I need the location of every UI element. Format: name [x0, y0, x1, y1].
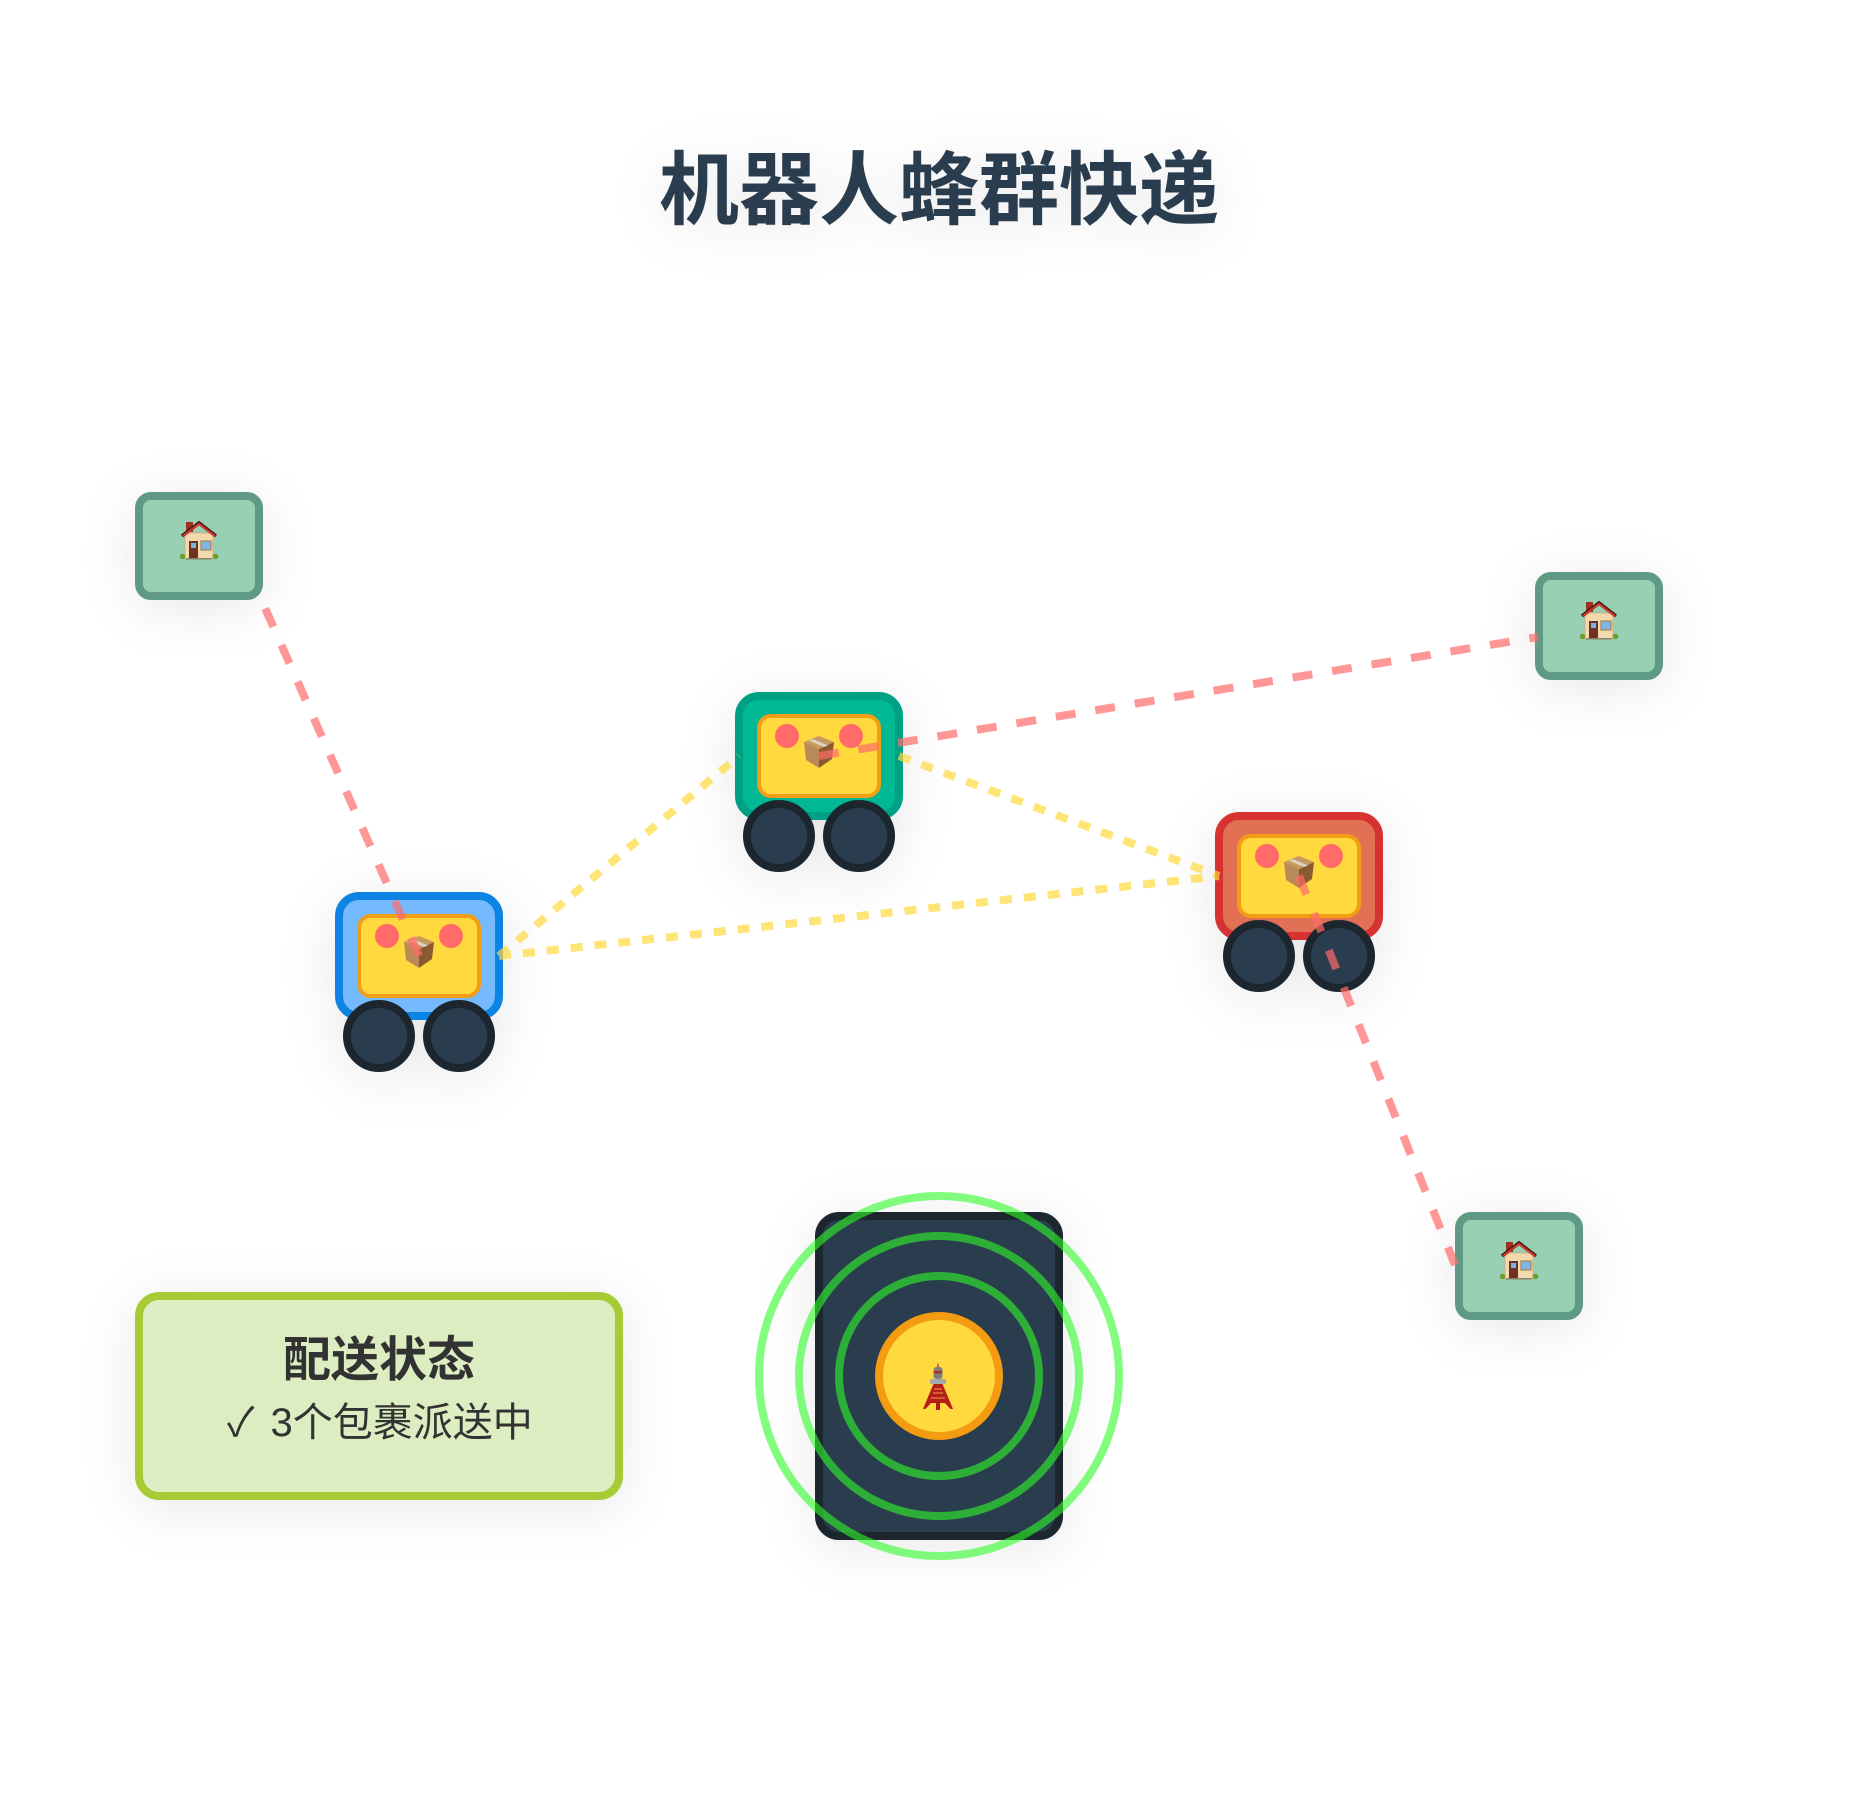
icon: tower [923, 1362, 953, 1410]
delivery routes [265, 608, 1538, 1265]
icon: house 1 [180, 522, 218, 560]
icon: package [404, 936, 434, 968]
icon: package [804, 736, 834, 768]
house node 1 [139, 496, 259, 596]
icon: house 3 [1500, 1242, 1538, 1280]
status heading: 配送状态 [283, 1334, 475, 1387]
signal tower [759, 1196, 1119, 1556]
house node 2 [1539, 576, 1659, 676]
tower body [819, 1216, 1059, 1536]
robot: green [739, 696, 899, 868]
swarm communication links [499, 756, 1219, 956]
status detail: ✓ [227, 1401, 254, 1445]
icon: package [1284, 856, 1314, 888]
title: 机器人蜂群快递 [659, 146, 1219, 235]
tower beacon [879, 1316, 999, 1436]
icon: house 2 [1580, 602, 1618, 640]
robot: blue [339, 896, 499, 1068]
signal rings [759, 1196, 1119, 1556]
robot: red [1219, 816, 1379, 988]
status detail: 3个包裹派送中 [270, 1401, 533, 1445]
status panel [139, 1296, 619, 1496]
house node 3 [1459, 1216, 1579, 1316]
